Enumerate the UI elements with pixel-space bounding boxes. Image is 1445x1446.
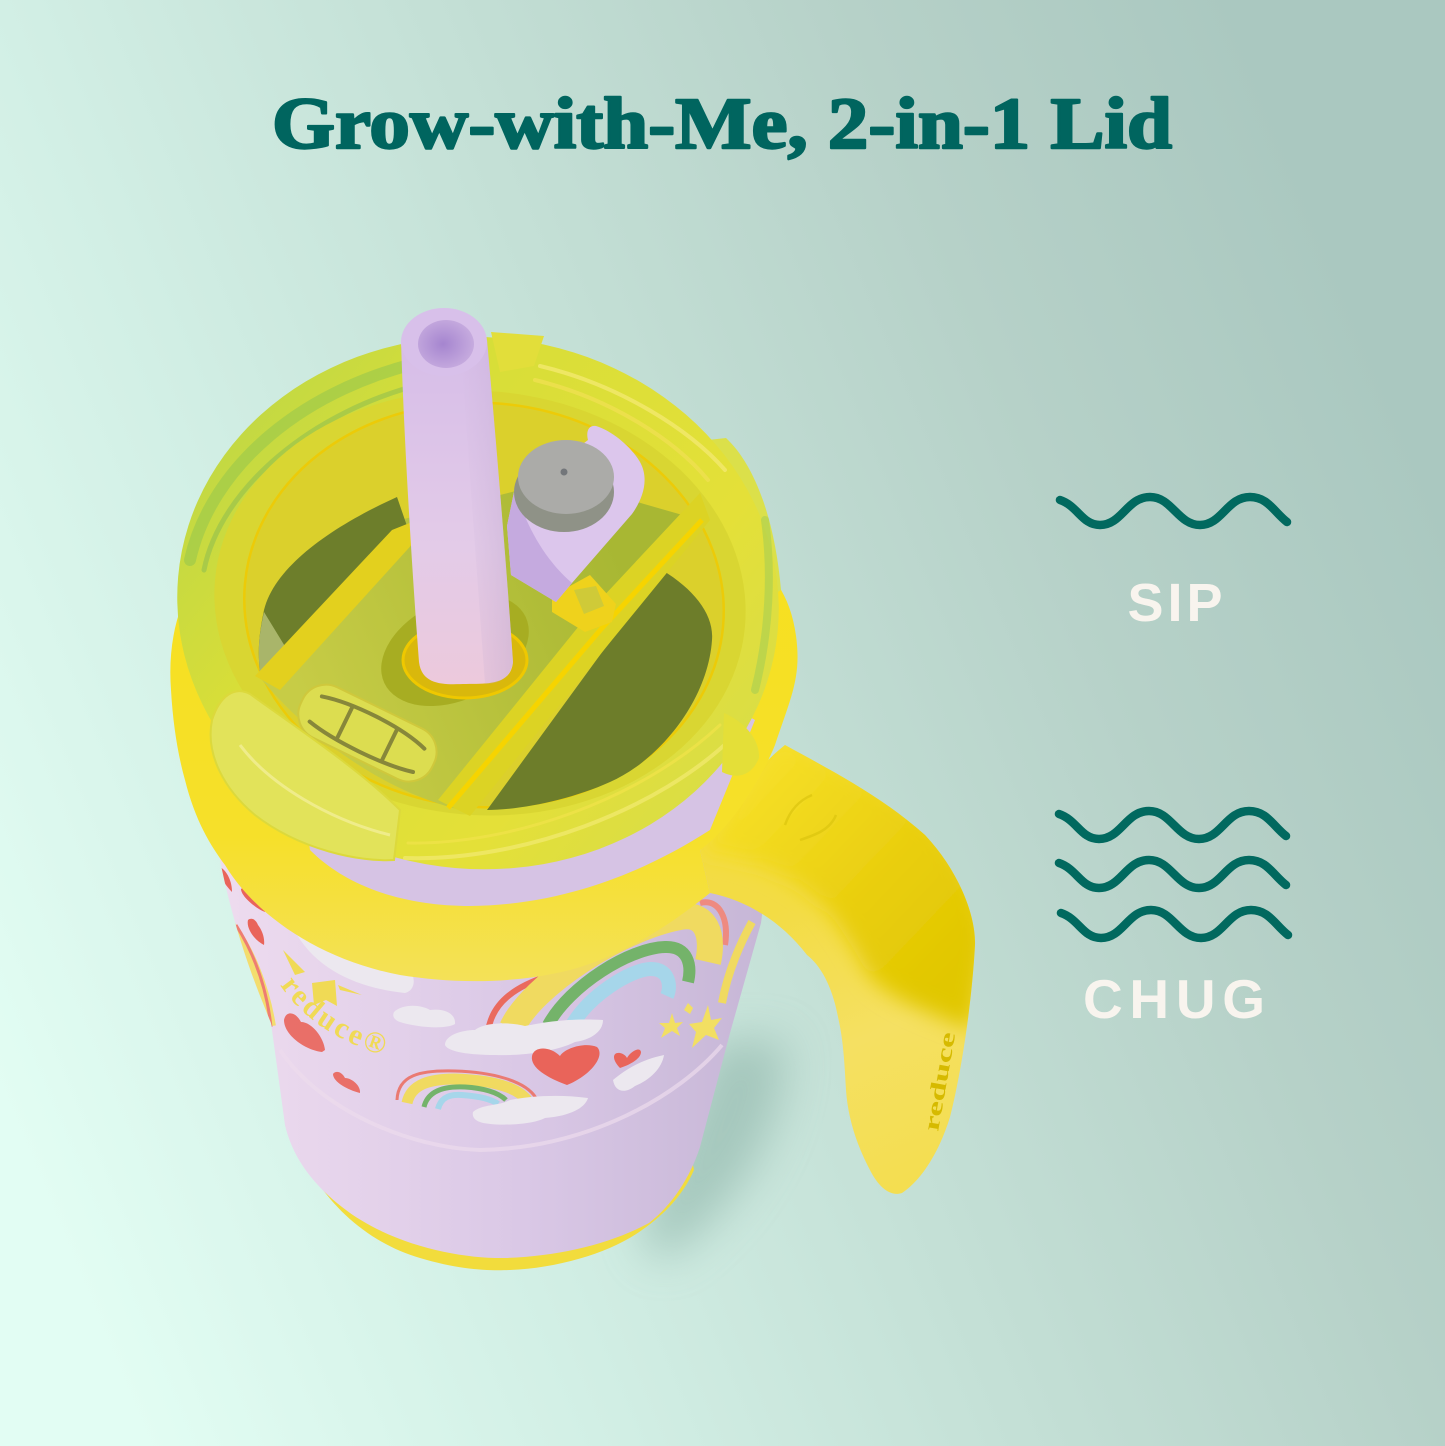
window lower-left pale area [259, 612, 286, 676]
front tab ridge [240, 745, 390, 835]
band seam [401, 1044, 724, 1152]
spout lilac base [507, 426, 645, 602]
spout insert [507, 426, 645, 602]
spout base shading [507, 487, 572, 602]
handle [700, 735, 986, 1194]
straw rim [401, 308, 487, 376]
sip indicator [1060, 497, 1287, 633]
handle upper face [700, 735, 986, 1030]
straw shaft [401, 340, 513, 684]
chug indicator [1059, 811, 1288, 1030]
right edge rainbow [722, 922, 752, 1003]
large rainbow [488, 902, 726, 1032]
front rim tab [211, 691, 400, 860]
icon: triple wave [1059, 811, 1288, 938]
handle lower face [700, 745, 975, 1194]
left window [259, 497, 407, 676]
yellow collar [170, 500, 798, 981]
central strip [262, 480, 700, 812]
tumbler product illustration [170, 308, 976, 1270]
right hinge rail [438, 493, 710, 816]
yellow base ring [318, 1150, 694, 1270]
straw [401, 308, 513, 684]
lid outer rim [155, 312, 801, 894]
gray valve side [514, 452, 614, 532]
straw right shading [460, 340, 513, 684]
label: sip: SIP [1128, 573, 1222, 633]
clouds [297, 915, 664, 1125]
straw well [363, 572, 547, 728]
brand wordmark on wrap: reduce® [280, 978, 386, 1052]
straw seat [403, 622, 527, 698]
cup body [218, 850, 770, 1258]
right hinge highlight [448, 520, 702, 808]
lilac neck [300, 700, 755, 906]
left hinge rail [255, 522, 416, 690]
icon: single wave [1060, 497, 1287, 525]
top rim tab [491, 332, 544, 372]
printed wrap pattern [222, 868, 756, 1152]
handle logo mark [785, 795, 836, 840]
right rim tab [708, 438, 781, 600]
valve pinhole [560, 468, 568, 476]
lid emblem [290, 676, 445, 790]
latch clip [552, 575, 616, 632]
hearts [220, 867, 641, 1093]
lid inner well [197, 369, 763, 837]
small rainbow [397, 1071, 536, 1109]
cast shadow [640, 1040, 785, 1262]
left edge rainbow [235, 923, 276, 1027]
gray valve top [518, 440, 614, 514]
rim grip ridges [190, 358, 769, 858]
brand crown [283, 950, 362, 1006]
label: chug: CHUG [1083, 968, 1265, 1030]
lid [155, 312, 801, 894]
straw hole [418, 320, 474, 368]
right window [487, 570, 712, 810]
handle wordmark: reduce [918, 1030, 960, 1133]
lid inner floor [227, 383, 741, 827]
right rim knob [722, 713, 759, 776]
title: Grow-with-Me, 2-in-1 Lid [272, 83, 1172, 164]
stars [659, 1003, 722, 1048]
